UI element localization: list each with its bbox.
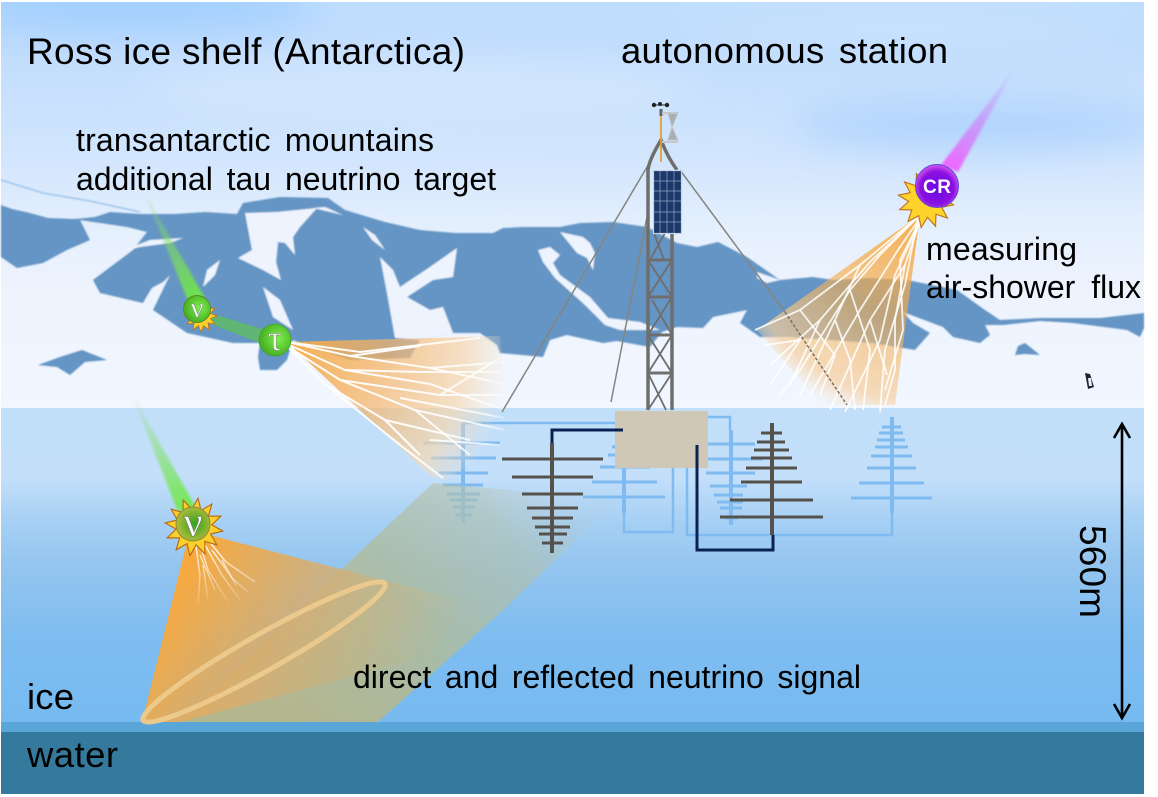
tau particle xyxy=(259,318,291,358)
background: ice layer xyxy=(1,408,1144,723)
dark antenna left xyxy=(502,430,623,553)
light antenna 2 xyxy=(583,430,665,513)
lower neutrino interaction xyxy=(161,494,227,560)
mast top xyxy=(660,115,662,162)
snow patches on mountains xyxy=(117,207,780,340)
penguin xyxy=(1085,373,1094,389)
label: signal: direct and reflected neutrino signal xyxy=(353,659,861,695)
tau particle: τ xyxy=(268,318,282,358)
label: mountains: transantarctic mountains xyxy=(76,122,434,158)
heading: autonomous station: autonomous station xyxy=(621,30,948,71)
upper neutrino interaction: ν xyxy=(191,293,203,324)
tau trail xyxy=(208,313,268,344)
central station box xyxy=(615,411,708,468)
solar panel xyxy=(654,170,682,234)
weather station tower xyxy=(648,102,682,410)
title: Ross ice shelf (Antarctica) xyxy=(27,31,465,72)
label: air-shower flux: measuring xyxy=(926,231,1077,267)
dark antenna right xyxy=(697,423,823,550)
reflected neutrino signal beam xyxy=(180,483,618,722)
label: water: water xyxy=(26,734,118,775)
light antenna 3 xyxy=(706,430,763,525)
small island left xyxy=(38,350,107,375)
upper neutrino interaction xyxy=(184,293,217,332)
mountains xyxy=(1,180,1144,375)
guy wires xyxy=(502,162,847,412)
anemometer xyxy=(652,102,669,116)
ice-water boundary band xyxy=(1,722,1144,733)
background: water xyxy=(1,732,1144,794)
cosmic ray trail xyxy=(941,65,1017,172)
ridge line xyxy=(1,180,140,212)
light cables xyxy=(463,417,892,535)
wind turbine xyxy=(662,113,678,142)
tau air shower xyxy=(287,336,510,480)
lower neutrino shower lines xyxy=(195,538,255,605)
cosmic ray air shower xyxy=(755,215,922,412)
label: air-shower flux xyxy=(926,231,1141,305)
label: mountains xyxy=(76,122,496,197)
sky cloud bands xyxy=(0,0,1158,149)
label: mountains: additional tau neutrino target xyxy=(76,161,496,197)
label: air-shower flux: air-shower flux xyxy=(926,269,1141,305)
small island right xyxy=(1015,343,1040,355)
Cherenkov ring xyxy=(134,568,394,736)
cosmic ray particle xyxy=(894,164,958,232)
label: depth: 560m xyxy=(1072,525,1113,618)
lower neutrino interaction: ν xyxy=(184,500,202,546)
buried light antennas and cables xyxy=(423,417,932,535)
light antenna 4 xyxy=(851,417,932,513)
neutrino trail upper xyxy=(143,190,205,303)
depth arrow xyxy=(1114,424,1130,718)
label: ice: ice xyxy=(27,676,74,717)
lower neutrino trail xyxy=(130,390,195,512)
cosmic ray particle: CR xyxy=(923,177,951,198)
background: sky xyxy=(1,2,1144,408)
light antenna 1 xyxy=(423,423,500,523)
direct neutrino signal cone xyxy=(142,530,468,722)
